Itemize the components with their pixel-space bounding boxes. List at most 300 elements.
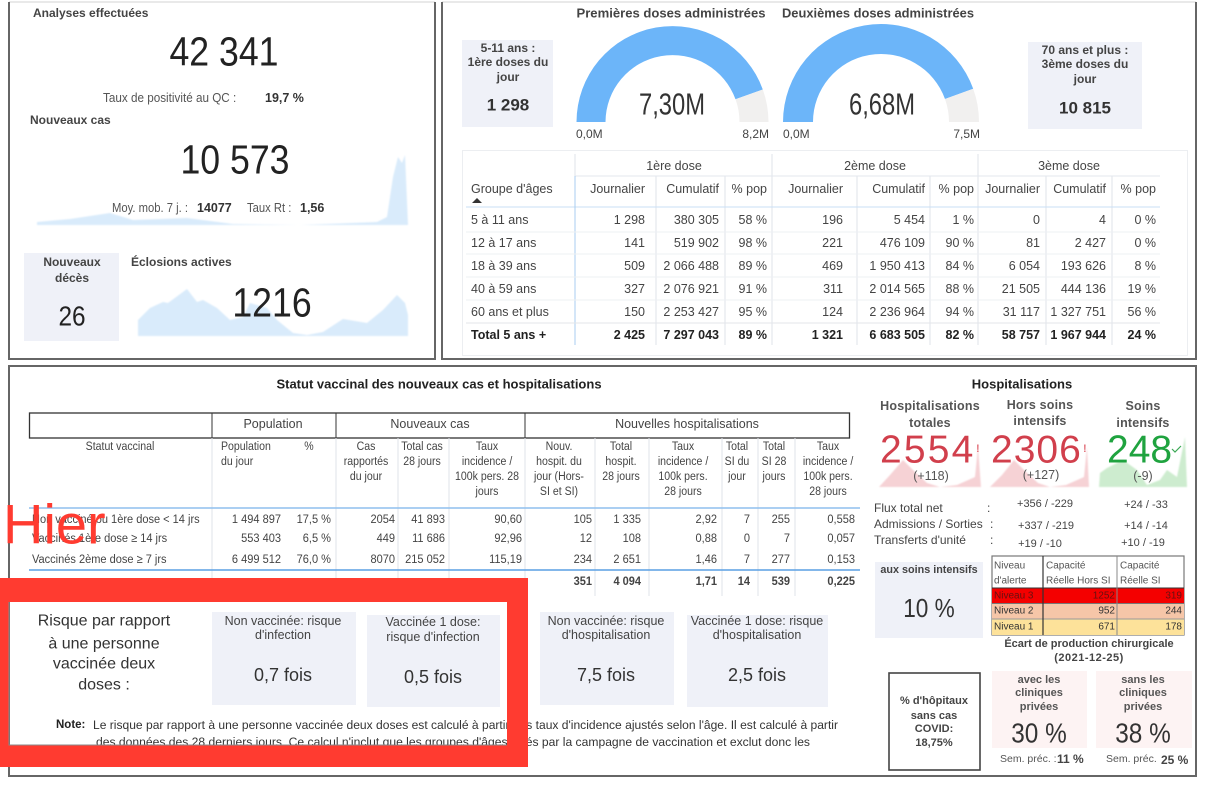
table total row: 7 297 043 xyxy=(663,328,719,342)
table rows: 150 xyxy=(624,305,645,319)
table rows: 0 xyxy=(1033,213,1040,227)
card: 70+ third doses: jour xyxy=(1073,72,1097,86)
data rows: 1,46 xyxy=(696,554,717,566)
number: new cases: 10 573 xyxy=(180,137,290,183)
column headers: Total xyxy=(610,441,632,453)
table rows: 19 % xyxy=(1128,282,1156,296)
table rows: 6 054 xyxy=(1009,259,1040,273)
card: new deaths: Nouveaux xyxy=(43,255,101,269)
table header: % pop xyxy=(939,182,974,196)
table rows: 0 % xyxy=(1134,213,1156,227)
column headers: 28 jours xyxy=(403,456,441,468)
table rows: 8 % xyxy=(1134,259,1156,273)
table: vaccine status xyxy=(29,413,860,596)
flow statistics: Admissions / Sorties xyxy=(874,517,983,531)
gauge: second doses: 6,68M xyxy=(849,86,915,122)
table rows: 98 % xyxy=(738,236,767,250)
table: alert levels: Capacité xyxy=(1120,560,1160,572)
table rows: 0 % xyxy=(1134,236,1156,250)
card: with private clinics xyxy=(992,671,1087,766)
card: unvaccinated infection risk: d'infection xyxy=(255,628,311,642)
card: one dose hospitalisation risk: Vaccinée 1 dose: risque xyxy=(691,614,823,628)
table rows: 60 ans et plus xyxy=(471,305,549,319)
kpi: total hospitalisations xyxy=(879,399,981,487)
card: with private clinics: avec les xyxy=(1018,674,1060,686)
number: analyses: 42 341 xyxy=(169,29,279,75)
table: alert levels: Niveau 2 xyxy=(994,606,1034,616)
card: with private clinics: privées xyxy=(1020,701,1058,713)
table rows: 476 109 xyxy=(880,236,925,250)
annotation: red highlight frame xyxy=(0,578,528,767)
table rows: 469 xyxy=(822,259,843,273)
data rows: 0,057 xyxy=(827,533,855,545)
table rows: 509 xyxy=(624,259,645,273)
positivity rate xyxy=(103,91,304,105)
table: alert levels: d'alerte xyxy=(994,576,1027,586)
table total row: 89 % xyxy=(738,328,767,342)
table: doses by age group xyxy=(462,150,1188,356)
table: alert levels: 319 xyxy=(1165,590,1182,602)
gauge: second doses: Deuxièmes doses administrées xyxy=(782,6,974,20)
table rows: 18 à 39 ans xyxy=(471,259,536,273)
data rows: 92,96 xyxy=(494,533,522,545)
kpi: outside intensive care: intensifs xyxy=(1013,414,1067,428)
heading: new cases: Nouveaux cas xyxy=(30,113,111,127)
column headers: Nouv. xyxy=(546,441,572,453)
data rows: 7 xyxy=(744,514,750,526)
column headers: Population xyxy=(221,441,271,453)
note: Note: xyxy=(56,719,85,731)
table rows: 519 902 xyxy=(674,236,719,250)
table total row xyxy=(471,328,1156,342)
moving average and Rt: Moy. mob. 7 j. : xyxy=(112,201,188,215)
table rows: 95 % xyxy=(738,305,767,319)
flow statistics: Transferts d'unité xyxy=(874,533,966,547)
kpi: intensive care: 248 xyxy=(1107,428,1172,472)
total row: 4 094 xyxy=(613,576,642,588)
data rows: 7 xyxy=(784,533,790,545)
total row: 0,225 xyxy=(827,576,856,588)
card: 5-11 first doses: 5-11 ans : xyxy=(481,41,535,55)
data rows: Non vacciné ou 1ère dose < 14 jrs xyxy=(32,514,200,526)
column headers: hospit. du xyxy=(536,456,582,468)
table header: % pop xyxy=(1121,182,1156,196)
card: 70+ third doses: 70 ans et plus : xyxy=(1042,43,1128,57)
kpi: total hospitalisations: ! xyxy=(976,443,980,455)
card: one dose hospitalisation risk: 2,5 fois xyxy=(728,665,786,685)
card: unvaccinated infection risk xyxy=(212,612,356,705)
panel: vaccination xyxy=(442,2,1196,359)
data rows: 0,558 xyxy=(827,514,855,526)
card: with private clinics: cliniques xyxy=(1015,687,1063,699)
data rows: 6 499 512 xyxy=(232,554,281,566)
column headers: Statut vaccinal xyxy=(86,441,154,453)
column headers: 100k pers. 28 xyxy=(455,471,519,483)
flow statistics: +337 / -219 xyxy=(1018,520,1074,532)
table rows: 58 % xyxy=(738,213,767,227)
card: hospitals without covid xyxy=(889,673,980,770)
data rows: 11 686 xyxy=(412,533,445,545)
column headers: 100k pers. xyxy=(803,471,853,483)
column headers: du jour xyxy=(221,456,253,468)
gauge: first doses: Premières doses administrées xyxy=(576,6,766,20)
table header xyxy=(471,159,1156,203)
column headers: incidence / xyxy=(803,456,854,468)
table: alert levels: Réelle SI xyxy=(1120,576,1161,586)
table header: % pop xyxy=(732,182,767,196)
table: alert levels xyxy=(992,556,1184,635)
data rows: 255 xyxy=(772,514,790,526)
risk label: Risque par rapport xyxy=(38,612,171,630)
card: without private clinics: 38 % xyxy=(1115,717,1171,749)
card: unvaccinated hospitalisation risk: Non vaccinée: risque xyxy=(548,614,664,628)
table rows: 2 066 488 xyxy=(663,259,719,273)
table: alert levels: Réelle Hors SI xyxy=(1046,576,1110,586)
table rows: 193 626 xyxy=(1061,259,1106,273)
moving average and Rt: 14077 xyxy=(197,201,232,215)
total row: 539 xyxy=(772,576,790,588)
column headers: SI et SI) xyxy=(540,486,578,498)
number: active outbreaks: 1216 xyxy=(232,280,312,326)
kpi: outside intensive care xyxy=(990,398,1089,487)
column headers: du jour xyxy=(350,471,382,483)
data rows: 2,92 xyxy=(696,514,717,526)
card: 5-11 first doses xyxy=(462,40,553,127)
table rows: 2 236 964 xyxy=(869,305,925,319)
kpi: total hospitalisations: 2554 xyxy=(880,428,976,472)
gauge: second doses: 7,5M xyxy=(953,127,980,141)
data rows: 1 335 xyxy=(613,514,641,526)
column headers: jours xyxy=(762,471,786,483)
positivity rate: Taux de positivité au QC : xyxy=(103,91,236,105)
card: one dose infection risk: Vaccinée 1 dose: xyxy=(386,615,480,629)
gauge: first doses: 7,30M xyxy=(639,86,705,122)
kpi: total hospitalisations: Hospitalisations xyxy=(880,399,980,413)
data rows: 108 xyxy=(623,533,641,545)
data rows: 2054 xyxy=(371,514,396,526)
flow statistics: : xyxy=(987,501,990,515)
annotation: Hier: Hier xyxy=(3,492,106,556)
card: without private clinics xyxy=(1096,671,1192,767)
card: hospitals without covid: COVID: xyxy=(915,723,953,735)
kpi: outside intensive care: (+127) xyxy=(1023,468,1059,482)
card: 70+ third doses: 3ème doses du xyxy=(1042,57,1128,71)
data rows: 0,153 xyxy=(827,554,855,566)
card: new deaths: décès xyxy=(55,271,89,285)
table rows: 56 % xyxy=(1128,305,1156,319)
data rows xyxy=(32,514,855,566)
kpi: intensive care: Soins xyxy=(1125,399,1161,413)
risk label: à une personne xyxy=(48,636,160,652)
card: new deaths xyxy=(24,253,119,341)
card: 5-11 first doses: 1ère doses du xyxy=(468,55,548,69)
table header: Groupe d'âges xyxy=(471,182,553,196)
data rows: 1 494 897 xyxy=(232,514,281,526)
column headers: Cas xyxy=(357,441,376,453)
card: hospitals without covid: 18,75% xyxy=(915,737,953,749)
card: unvaccinated infection risk: 0,7 fois xyxy=(254,665,312,685)
card: intensive care share xyxy=(875,562,983,638)
column headers: Taux xyxy=(672,441,694,453)
table rows: 444 136 xyxy=(1061,282,1106,296)
table rows: 124 xyxy=(822,305,843,319)
column headers: Total xyxy=(726,441,748,453)
table rows: 5 454 xyxy=(894,213,925,227)
data rows: 76,0 % xyxy=(297,554,331,566)
note: des données des 28 derniers jours. Ce calcul n'inclut que les groupes d'âges visés par la campagne de vaccination et exclut donc les xyxy=(96,735,810,749)
table header: Journalier xyxy=(590,182,645,196)
heading: surgical gap: (2021-12-25) xyxy=(1054,652,1124,664)
flow statistics: +10 / -19 xyxy=(1121,537,1165,549)
flow statistics: : xyxy=(990,517,993,531)
table: alert levels: 671 xyxy=(1098,622,1115,632)
column headers: rapportés xyxy=(344,456,389,468)
total row: 1,71 xyxy=(696,576,718,588)
card: one dose infection risk: risque d'infection xyxy=(386,630,480,644)
column headers: Total xyxy=(763,441,785,453)
table rows: 196 xyxy=(822,213,843,227)
panel: vaccine status and hospitalisations xyxy=(9,366,1196,776)
card: intensive care share: 10 % xyxy=(903,595,955,623)
risk label: doses : xyxy=(78,676,130,694)
card: without private clinics: cliniques xyxy=(1119,687,1167,699)
panel: tests and cases xyxy=(9,2,435,359)
table: alert levels: 244 xyxy=(1165,606,1182,616)
group headers: Nouvelles hospitalisations xyxy=(615,417,759,431)
table rows: 221 xyxy=(822,236,843,250)
table rows: 90 % xyxy=(946,236,974,250)
table rows: 380 305 xyxy=(674,213,719,227)
kpi: intensive care: intensifs xyxy=(1116,416,1170,430)
column headers: jour (Hors- xyxy=(533,471,584,483)
table: alert levels: Niveau 1 xyxy=(994,622,1034,632)
data rows: 105 xyxy=(574,514,592,526)
card: with private clinics: 11 % xyxy=(1057,752,1084,766)
table rows: 88 % xyxy=(946,282,974,296)
table header: Cumulatif xyxy=(666,182,720,196)
card: with private clinics: 30 % xyxy=(1011,717,1067,749)
table rows: 1 950 413 xyxy=(869,259,925,273)
table rows: 1 327 751 xyxy=(1050,305,1106,319)
table header: Journalier xyxy=(788,182,843,196)
card: intensive care share: aux soins intensifs xyxy=(880,564,978,576)
table rows: 94 % xyxy=(946,305,974,319)
kpi: outside intensive care: Hors soins xyxy=(1007,398,1073,412)
table rows: 1 % xyxy=(952,213,974,227)
flow statistics: +14 / -14 xyxy=(1124,520,1168,532)
table rows: 2 427 xyxy=(1075,236,1106,250)
kpi: intensive care xyxy=(1099,399,1187,487)
table: alert levels: Niveau xyxy=(994,560,1025,572)
data rows: 6,5 % xyxy=(303,533,331,545)
data rows: 2 651 xyxy=(613,554,641,566)
table rows: 21 505 xyxy=(1002,282,1040,296)
card: one dose hospitalisation risk: d'hospitalisation xyxy=(713,628,801,642)
table rows: 1 298 xyxy=(614,213,645,227)
heading: hospitalisations: Hospitalisations xyxy=(972,376,1072,392)
table total row: Total 5 ans + xyxy=(471,328,546,342)
risk label xyxy=(38,612,171,694)
table rows: 141 xyxy=(624,236,645,250)
column headers: SI 28 xyxy=(762,456,786,468)
table header: 1ère dose xyxy=(646,159,702,173)
card: 70+ third doses: 10 815 xyxy=(1059,98,1111,118)
flow statistics: Flux total net xyxy=(874,501,943,515)
data rows: 234 xyxy=(574,554,593,566)
card: one dose infection risk: 0,5 fois xyxy=(404,667,462,687)
table rows: 4 xyxy=(1099,213,1106,227)
table: alert levels: Capacité xyxy=(1046,560,1086,572)
card: 70+ third doses xyxy=(1028,42,1142,129)
data rows: 17,5 % xyxy=(297,514,331,526)
card: 5-11 first doses: 1 298 xyxy=(487,96,529,114)
table rows: 31 117 xyxy=(1003,305,1040,319)
table rows: 91 % xyxy=(738,282,767,296)
table rows: 40 à 59 ans xyxy=(471,282,536,296)
card: hospitals without covid: sans cas xyxy=(911,710,957,722)
flow statistics: +24 / -33 xyxy=(1124,499,1168,511)
data rows: 7 xyxy=(744,554,750,566)
data rows: 553 403 xyxy=(241,533,281,545)
table header: Cumulatif xyxy=(1053,182,1107,196)
gauge: first doses xyxy=(576,6,769,141)
table: alert levels: Niveau 3 xyxy=(994,590,1034,602)
table rows xyxy=(471,213,1156,319)
table rows: 311 xyxy=(823,282,843,296)
column headers: Total cas xyxy=(401,441,443,453)
column headers: incidence / xyxy=(658,456,709,468)
data rows: 215 052 xyxy=(405,554,445,566)
flow statistics: : xyxy=(990,533,993,547)
chart: new cases area xyxy=(37,155,408,225)
gauge: second doses xyxy=(782,6,980,141)
data rows: 41 893 xyxy=(411,514,445,526)
card: without private clinics: 25 % xyxy=(1161,753,1189,767)
heading: surgical gap xyxy=(1004,637,1174,664)
kpi: outside intensive care: 2306 xyxy=(991,428,1082,472)
data rows: 8070 xyxy=(370,554,395,566)
table total row: 24 % xyxy=(1128,328,1156,342)
flow statistics: +356 / -229 xyxy=(1017,498,1073,510)
moving average and Rt: 1,56 xyxy=(300,201,324,215)
card: with private clinics: Sem. préc. : xyxy=(1000,753,1057,765)
card: without private clinics: privées xyxy=(1124,701,1162,713)
kpi: outside intensive care: ! xyxy=(1083,443,1087,455)
group headers xyxy=(243,417,759,431)
table rows: 12 à 17 ans xyxy=(471,236,536,250)
data rows: Vaccinés 2ème dose ≥ 7 jrs xyxy=(32,554,167,566)
column headers: hospit. xyxy=(605,456,637,468)
table rows: 5 à 11 ans xyxy=(471,213,528,227)
card: one dose hospitalisation risk xyxy=(687,614,828,707)
card: unvaccinated infection risk: Non vaccinée: risque xyxy=(225,614,341,628)
table header: 3ème dose xyxy=(1038,159,1100,173)
table: alert levels: 952 xyxy=(1098,606,1115,616)
table: alert levels: 178 xyxy=(1165,622,1182,632)
data rows: 115,19 xyxy=(489,554,522,566)
moving average and Rt: Taux Rt : xyxy=(247,201,291,215)
table rows: 84 % xyxy=(946,259,974,273)
table total row: 58 757 xyxy=(1002,328,1040,342)
table rows: 327 xyxy=(624,282,645,296)
table rows: 2 014 565 xyxy=(869,282,925,296)
total row xyxy=(574,576,856,588)
risk label: vaccinée deux xyxy=(53,656,155,672)
column headers: 28 jours xyxy=(664,486,702,498)
table header: Cumulatif xyxy=(872,182,926,196)
card: new deaths: 26 xyxy=(58,300,86,332)
table total row: 82 % xyxy=(946,328,974,342)
table header: Journalier xyxy=(985,182,1040,196)
card: one dose infection risk xyxy=(367,615,500,707)
card: without private clinics: sans les xyxy=(1121,674,1165,686)
data rows: 0,88 xyxy=(696,533,717,545)
column headers xyxy=(86,441,854,498)
heading: analyses: Analyses effectuées xyxy=(33,6,149,20)
data rows: 277 xyxy=(772,554,790,566)
data rows: 12 xyxy=(580,533,592,545)
card: hospitals without covid: % d'hôpitaux xyxy=(900,695,969,707)
column headers: incidence / xyxy=(462,456,513,468)
column headers: jour xyxy=(727,471,746,483)
column headers: 28 jours xyxy=(809,486,847,498)
flow statistics xyxy=(874,498,1168,550)
data rows: 90,60 xyxy=(494,514,522,526)
chart: outbreaks area xyxy=(138,289,408,336)
table total row: 2 425 xyxy=(614,328,645,342)
table rows: 2 076 921 xyxy=(663,282,719,296)
group headers: Population xyxy=(243,417,303,431)
data rows: 449 xyxy=(377,533,395,545)
column headers: SI du xyxy=(725,456,749,468)
card: 5-11 first doses: jour xyxy=(496,70,520,84)
column headers: % xyxy=(304,441,314,453)
gauge: first doses: 8,2M xyxy=(742,127,769,141)
heading: vaccine status: Statut vaccinal des nouveaux cas et hospitalisations xyxy=(276,376,602,392)
data rows: 0 xyxy=(744,533,750,545)
table: alert levels: 1252 xyxy=(1093,590,1115,602)
flow statistics: +19 / -10 xyxy=(1018,538,1062,550)
card: unvaccinated hospitalisation risk xyxy=(540,612,674,705)
total row: 14 xyxy=(738,576,751,588)
table total row: 1 967 944 xyxy=(1050,328,1106,342)
gauge: second doses: 0,0M xyxy=(783,127,810,141)
card: unvaccinated hospitalisation risk: d'hospitalisation xyxy=(562,628,650,642)
positivity rate: 19,7 % xyxy=(265,91,304,105)
table rows: 81 xyxy=(1026,236,1040,250)
column headers: Taux xyxy=(817,441,839,453)
note: Le risque par rapport à une personne vaccinée deux doses est calculé à partir des taux d'incidence ajustés selon l'âge. Il est calculé à partir xyxy=(93,718,838,732)
card: without private clinics: Sem. préc. xyxy=(1106,753,1157,765)
heading: surgical gap: Écart de production chirurgicale xyxy=(1004,637,1174,650)
kpi: total hospitalisations: (+118) xyxy=(913,469,949,483)
total row: 351 xyxy=(574,576,593,588)
kpi: total hospitalisations: totales xyxy=(909,416,951,430)
group headers: Nouveaux cas xyxy=(390,417,470,431)
table total row: 1 321 xyxy=(812,328,843,342)
heading: active outbreaks: Éclosions actives xyxy=(131,254,232,269)
table total row: 6 683 505 xyxy=(869,328,925,342)
kpi: intensive care: (-9) xyxy=(1133,469,1153,483)
note xyxy=(56,718,838,749)
column headers: jours xyxy=(475,486,499,498)
column headers: 100k pers. xyxy=(658,471,708,483)
column headers: 28 jours xyxy=(602,471,640,483)
card: unvaccinated hospitalisation risk: 7,5 fois xyxy=(577,665,635,685)
gauge: first doses: 0,0M xyxy=(576,127,603,141)
table header: 2ème dose xyxy=(844,159,906,173)
table rows: 2 253 427 xyxy=(663,305,719,319)
